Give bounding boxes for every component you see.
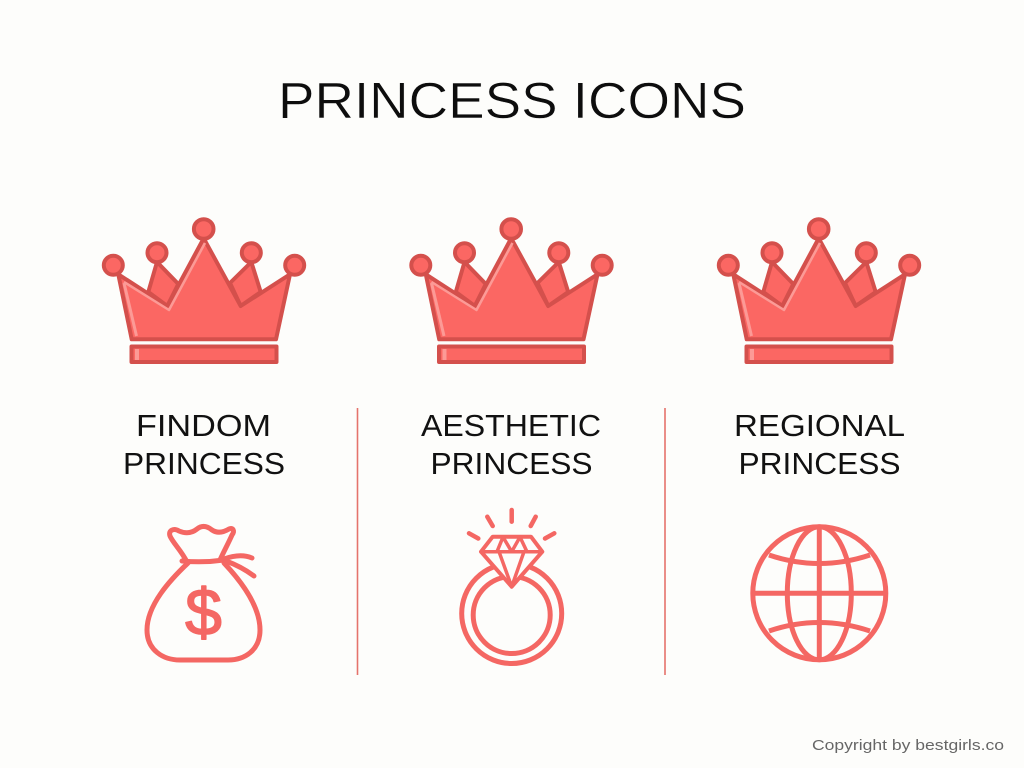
label: findom princess: [123, 408, 285, 481]
icon: diamond ring: [462, 510, 562, 664]
label: regional princess: PRINCESS: [738, 446, 900, 481]
label: regional princess: REGIONAL: [734, 408, 905, 443]
label: aesthetic princess: PRINCESS: [430, 446, 592, 481]
icon: crown, findom column: [104, 219, 304, 362]
icon: crown, aesthetic column: [411, 219, 612, 362]
icon: crown, regional column: [719, 219, 919, 362]
label: findom princess: FINDOM: [136, 408, 271, 443]
label: aesthetic princess: [421, 408, 601, 481]
label: aesthetic princess: AESTHETIC: [421, 408, 601, 443]
icon: money bag: [147, 526, 260, 660]
copyright note: Copyright by bestgirls.co: [812, 737, 1004, 754]
dollar sign: $: [185, 575, 222, 649]
label: regional princess: [734, 408, 905, 481]
title: PRINCESS ICONS: [278, 72, 746, 129]
label: findom princess: PRINCESS: [123, 446, 285, 481]
icon: globe: [753, 527, 886, 660]
